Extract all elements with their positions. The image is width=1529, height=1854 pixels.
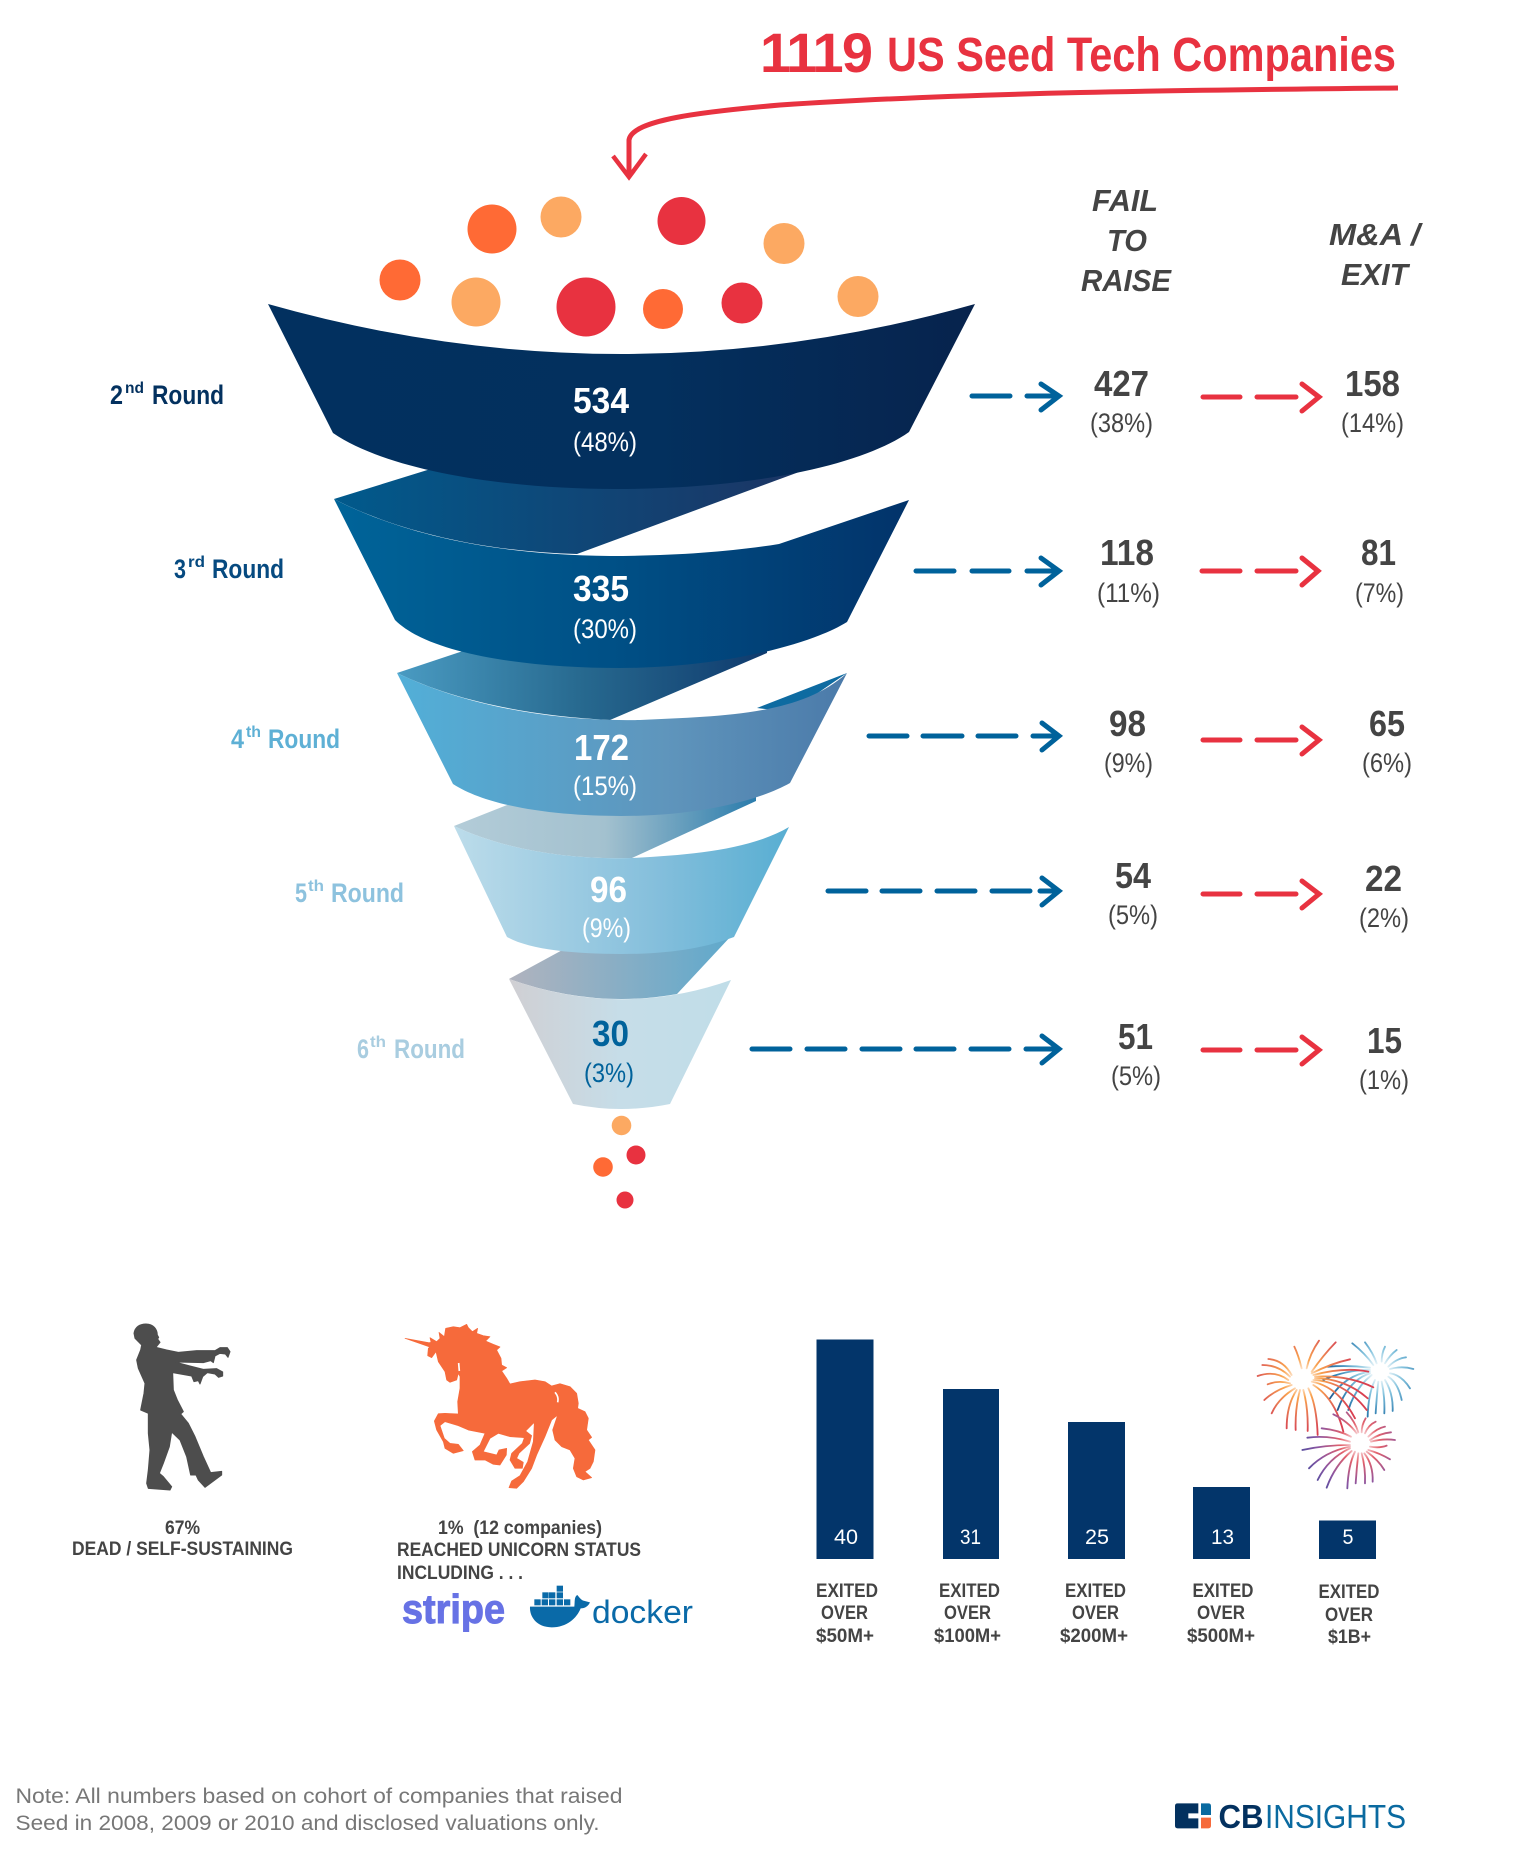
- bar: 200M+: OVER: [1072, 1603, 1119, 1624]
- stats: fail to raise: (9%): [1104, 748, 1153, 778]
- funnel values: 30: [592, 1013, 629, 1054]
- stats: exit: [1341, 363, 1404, 438]
- stats: fail to raise: 118: [1100, 532, 1154, 573]
- bar: 1B+: [1318, 1520, 1380, 1648]
- text: unicorn status: 1% (12 companies): [438, 1518, 602, 1539]
- label: 4th round: 4: [231, 724, 244, 754]
- bar: 200M+: EXITED: [1065, 1581, 1126, 1602]
- stats: fail to raise: (38%): [1090, 408, 1153, 438]
- heading: M&A / exit: [1329, 217, 1424, 292]
- bar: 50M+: EXITED: [816, 1581, 878, 1602]
- label: 2nd round: nd: [125, 380, 144, 397]
- label: 6th round: 6: [357, 1034, 369, 1064]
- row: 5th round outcomes: [828, 855, 1409, 933]
- stats: exit: (2%): [1359, 903, 1409, 933]
- label: 3rd round: Round: [212, 554, 284, 584]
- bar: 100M+: $100M+: [934, 1626, 1001, 1647]
- arrow: blue dashed: [869, 723, 1059, 750]
- bar: 1B+: $1B+: [1328, 1627, 1371, 1648]
- text: dead or self-sustaining: [72, 1518, 293, 1560]
- logo: CB Insights: [1175, 1798, 1406, 1835]
- arrow: blue dashed: [752, 1036, 1059, 1063]
- funnel values: 335: [573, 568, 629, 609]
- bar: 500M+: [1187, 1487, 1255, 1647]
- footnote: Seed in 2008, 2009 or 2010 and disclosed valuations only.: [16, 1812, 600, 1835]
- stats: exit: [1359, 1020, 1409, 1095]
- bar: 200M+: $200M+: [1060, 1626, 1128, 1647]
- text: dead or self-sustaining: 67%: [165, 1518, 200, 1539]
- stats: fail to raise: (5%): [1108, 900, 1158, 930]
- bar: 200M+: [1060, 1422, 1128, 1647]
- stats: fail to raise: [1090, 363, 1153, 438]
- bar: 50M+: $50M+: [816, 1626, 874, 1647]
- logo: stripe: stripe: [402, 1586, 505, 1632]
- arrow: blue dashed: [828, 878, 1059, 905]
- heading: fail to raise: RAISE: [1081, 263, 1172, 298]
- row: 6th round outcomes: [752, 1016, 1409, 1095]
- text: unicorn status: [397, 1518, 641, 1584]
- label: 2nd round: 2: [110, 380, 123, 410]
- stats: exit: 22: [1365, 858, 1402, 899]
- funnel values: (9%): [582, 913, 631, 943]
- funnel values: 96: [590, 869, 627, 910]
- stats: fail to raise: 427: [1094, 363, 1149, 404]
- title: [760, 21, 1396, 84]
- text: unicorn status: INCLUDING . . .: [397, 1563, 523, 1584]
- funnel tier: 6th round: [509, 935, 732, 1109]
- label: 5th round: [295, 878, 404, 908]
- funnel values: [573, 380, 637, 1088]
- stats: fail to raise: 98: [1109, 703, 1146, 744]
- funnel tier: 2nd round: [268, 304, 975, 489]
- label: 4th round: [231, 724, 340, 754]
- stats: exit: (6%): [1362, 748, 1412, 778]
- label: 6th round: [357, 1034, 465, 1064]
- footnote: [16, 1785, 622, 1835]
- funnel tier: 3rd round: [334, 463, 909, 668]
- icon: zombie: [134, 1324, 230, 1490]
- bar: 500M+: OVER: [1197, 1603, 1245, 1624]
- bar: 100M+: [934, 1389, 1001, 1647]
- label: 2nd round: Round: [152, 380, 224, 410]
- text: unicorn status: REACHED UNICORN STATUS: [397, 1540, 641, 1561]
- icon: unicorn: [405, 1324, 595, 1488]
- bar: 1B+: OVER: [1325, 1605, 1373, 1626]
- arrow: blue dashed: [972, 384, 1059, 410]
- label: 2nd round: [110, 380, 224, 410]
- label: 6th round: th: [370, 1034, 386, 1051]
- funnel values: (48%): [573, 427, 637, 457]
- arrow: blue dashed: [916, 558, 1059, 585]
- stats: exit: 158: [1345, 363, 1400, 404]
- arrow: red dashed: [1203, 881, 1319, 908]
- label: 6th round: Round: [394, 1034, 465, 1064]
- stats: fail to raise: [1097, 532, 1160, 608]
- arrow: red dashed: [1202, 558, 1318, 585]
- funnel values: 534: [573, 380, 629, 421]
- falling companies: top dots: [380, 196, 878, 336]
- label: 3rd round: rd: [188, 554, 205, 571]
- funnel values: (15%): [573, 771, 637, 801]
- heading: M&A / exit: EXIT: [1341, 257, 1411, 292]
- logo: CB Insights: INSIGHTS: [1265, 1798, 1406, 1835]
- heading: M&A / exit: M&A /: [1329, 217, 1424, 252]
- stats: exit: [1355, 532, 1404, 608]
- stats: fail to raise: 54: [1115, 855, 1151, 896]
- round labels: [110, 380, 465, 1064]
- label: 5th round: th: [308, 878, 324, 895]
- funnel: [268, 304, 975, 1109]
- falling companies: bottom dots: [593, 1116, 646, 1208]
- stats: exit: 15: [1367, 1020, 1402, 1061]
- logo: docker: docker: [592, 1594, 693, 1630]
- title: US Seed Tech Companies: [887, 29, 1396, 82]
- bar: 50M+: 40: [834, 1526, 858, 1549]
- arrow: red dashed: [1203, 384, 1319, 411]
- logo: CB Insights: CB: [1218, 1798, 1264, 1835]
- icon: fireworks: [1258, 1341, 1413, 1488]
- label: 3rd round: [174, 554, 284, 584]
- stats: fail to raise: [1108, 855, 1158, 930]
- bar: 500M+: $500M+: [1187, 1626, 1255, 1647]
- stats: fail to raise: (5%): [1111, 1061, 1161, 1091]
- stats: fail to raise: [1111, 1016, 1161, 1091]
- heading: fail to raise: TO: [1107, 223, 1147, 258]
- bar: 100M+: EXITED: [939, 1581, 1000, 1602]
- bar: 50M+: OVER: [821, 1603, 868, 1624]
- stats: exit: [1359, 858, 1409, 933]
- stats: fail to raise: 51: [1118, 1016, 1153, 1057]
- stats: exit: (1%): [1359, 1065, 1409, 1095]
- bar: 500M+: EXITED: [1192, 1581, 1254, 1602]
- stats: fail to raise: (11%): [1097, 578, 1160, 608]
- stats: exit: 65: [1369, 703, 1405, 744]
- title: 1119: [760, 21, 873, 84]
- stats: exit: [1362, 703, 1412, 778]
- label: 5th round: Round: [331, 878, 404, 908]
- row: 4th round outcomes: [869, 703, 1412, 778]
- heading: fail to raise: [1081, 183, 1172, 298]
- bar: 100M+: OVER: [944, 1603, 991, 1624]
- label: 4th round: th: [246, 724, 261, 741]
- bar: 1B+: 5: [1342, 1526, 1354, 1549]
- label: 3rd round: 3: [174, 554, 186, 584]
- text: dead or self-sustaining: DEAD / SELF-SUSTAINING: [72, 1539, 293, 1560]
- arrow: title to funnel: [613, 88, 1398, 177]
- arrow: red dashed: [1203, 727, 1319, 754]
- funnel values: (3%): [584, 1058, 634, 1088]
- stats: exit: 81: [1361, 532, 1396, 573]
- bar chart: exits: [816, 1340, 1380, 1648]
- label: 5th round: 5: [295, 878, 307, 908]
- funnel values: 172: [574, 727, 629, 768]
- footnote: Note: All numbers based on cohort of companies that raised: [16, 1785, 622, 1808]
- bar: 50M+: [816, 1340, 878, 1647]
- funnel tier: 4th round: [397, 640, 847, 816]
- stats: fail to raise: [1104, 703, 1153, 778]
- label: 4th round: Round: [268, 724, 340, 754]
- bar: 200M+: 25: [1085, 1526, 1109, 1549]
- stats: exit: (7%): [1355, 578, 1404, 608]
- logo: docker: [530, 1586, 693, 1630]
- row: 3rd round outcomes: [916, 532, 1404, 608]
- funnel values: (30%): [573, 614, 637, 644]
- funnel tier: 5th round: [454, 790, 789, 954]
- bar: 1B+: EXITED: [1318, 1582, 1380, 1603]
- heading: fail to raise: FAIL: [1092, 183, 1158, 218]
- bar: 100M+: 31: [960, 1526, 981, 1549]
- row: 2nd round outcomes: [972, 363, 1404, 438]
- arrow: red dashed: [1203, 1037, 1319, 1064]
- stats: exit: (14%): [1341, 408, 1404, 438]
- bar: 500M+: 13: [1211, 1526, 1234, 1549]
